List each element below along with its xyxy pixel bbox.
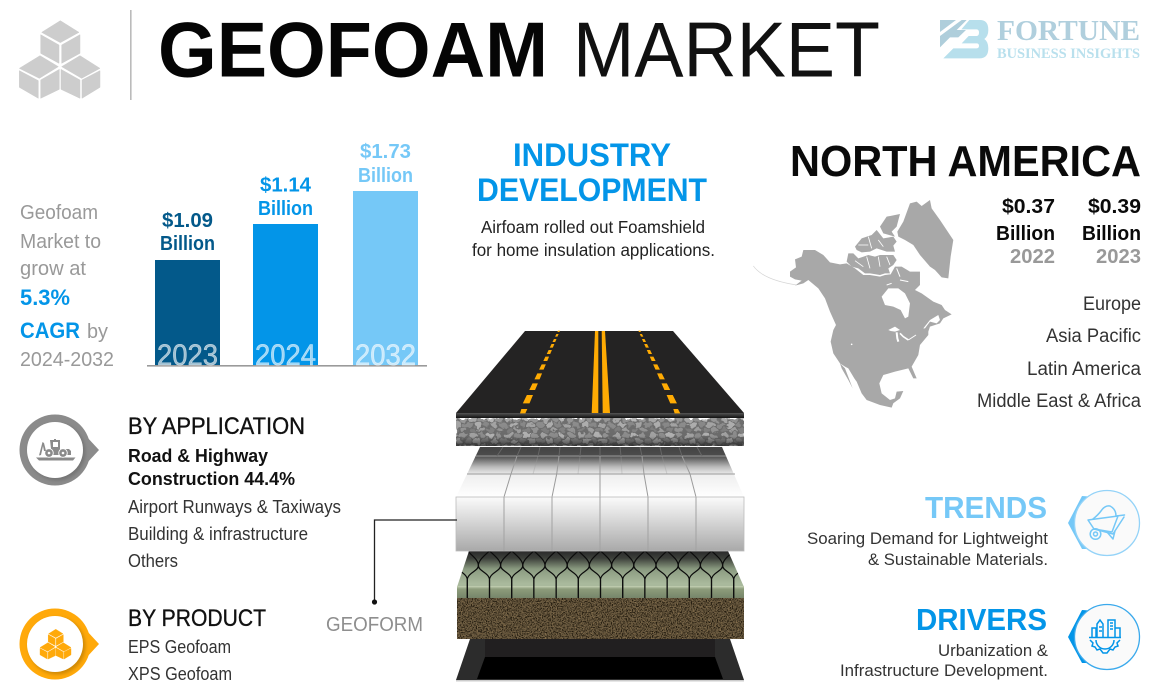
section: by application: Road & Highway bbox=[128, 446, 268, 466]
callout: geoform leader: GEOFORM bbox=[326, 614, 423, 636]
north america values: 2022 bbox=[1010, 246, 1055, 268]
map: north america bbox=[753, 200, 953, 408]
bar chart: Billion bbox=[358, 165, 413, 187]
icon: wheelbarrow badge bbox=[1068, 490, 1140, 556]
north america values bbox=[996, 196, 1141, 268]
icon: application tractor badge bbox=[20, 414, 99, 486]
heading: industry development bbox=[472, 137, 715, 260]
section: drivers: Urbanization & bbox=[938, 641, 1049, 660]
section: by product bbox=[128, 605, 266, 684]
CAGR text block: Geofoam bbox=[20, 202, 98, 224]
icon: city and gear badge bbox=[1068, 604, 1140, 670]
north america values: $0.37 bbox=[1002, 196, 1055, 218]
region list: Europe bbox=[1083, 294, 1141, 315]
heading: north america: NORTH AMERICA bbox=[790, 137, 1141, 186]
bar chart: $1.73 bbox=[360, 141, 411, 163]
brand logo: FORTUNE bbox=[997, 16, 1140, 47]
bar chart: 2024 bbox=[255, 339, 316, 372]
title: MARKET bbox=[573, 6, 880, 94]
section: trends: TRENDS bbox=[925, 490, 1047, 525]
section: by application: Building & infrastructure bbox=[128, 524, 308, 544]
region list: Asia Pacific bbox=[1046, 326, 1141, 347]
north america values: Billion bbox=[1082, 223, 1141, 245]
bar chart bbox=[147, 141, 427, 372]
section: drivers: DRIVERS bbox=[916, 602, 1047, 637]
bar chart: Billion bbox=[258, 198, 313, 220]
brand logo bbox=[940, 16, 1140, 62]
CAGR text block: Market to bbox=[20, 231, 101, 253]
section: trends: Soaring Demand for Lightweight bbox=[807, 529, 1048, 548]
CAGR text block: CAGR bbox=[20, 318, 80, 343]
section: by product: BY PRODUCT bbox=[128, 605, 266, 632]
title: GEOFOAM bbox=[158, 6, 548, 94]
section: by application: BY APPLICATION bbox=[128, 413, 305, 440]
heading: industry development: DEVELOPMENT bbox=[477, 172, 707, 208]
soil layer bbox=[457, 598, 744, 639]
bar chart: 2032 bbox=[355, 339, 416, 372]
section: by application bbox=[128, 413, 341, 571]
section: trends bbox=[807, 490, 1048, 569]
north america values: Billion bbox=[996, 223, 1055, 245]
callout: geoform leader bbox=[326, 520, 457, 636]
aggregate layer bbox=[456, 418, 744, 446]
heading: industry development: Airfoam rolled out Foamshield bbox=[481, 217, 705, 237]
region list: Latin America bbox=[1027, 359, 1141, 380]
road cross-section illustration bbox=[445, 331, 756, 682]
region list: Middle East & Africa bbox=[977, 391, 1141, 412]
bar chart: Billion bbox=[160, 233, 215, 255]
drainage mesh layer bbox=[445, 551, 756, 598]
section: by application: Others bbox=[128, 551, 178, 571]
bar chart: $1.09 bbox=[162, 210, 213, 232]
section: by product: XPS Geofoam bbox=[128, 664, 232, 684]
heading: industry development: INDUSTRY bbox=[513, 137, 671, 173]
geofoam layer bbox=[456, 447, 744, 551]
CAGR text block bbox=[20, 202, 114, 371]
road base layer bbox=[456, 639, 744, 682]
CAGR text block: 5.3% bbox=[20, 285, 70, 310]
brand logo: BUSINESS INSIGHTS bbox=[997, 46, 1140, 62]
section: drivers: Infrastructure Development. bbox=[840, 661, 1048, 680]
map: water features bbox=[845, 237, 940, 385]
section: trends: & Sustainable Materials. bbox=[868, 550, 1048, 569]
title bbox=[158, 6, 880, 94]
asphalt surface bbox=[456, 331, 744, 418]
section: by product: EPS Geofoam bbox=[128, 637, 231, 657]
icon: cubes logo bbox=[19, 21, 100, 98]
heading: industry development: for home insulation applications. bbox=[472, 240, 715, 260]
CAGR text block: by bbox=[87, 321, 108, 343]
bar chart: 2023 bbox=[157, 339, 218, 372]
north america values: 2023 bbox=[1096, 246, 1141, 268]
north america values: $0.39 bbox=[1088, 196, 1141, 218]
CAGR text block: 2024-2032 bbox=[20, 349, 114, 371]
section: by application: Airport Runways & Taxiways bbox=[128, 497, 341, 517]
section: drivers bbox=[840, 602, 1049, 680]
icon: product cubes badge bbox=[20, 608, 99, 680]
CAGR text block: grow at bbox=[20, 258, 86, 280]
region list bbox=[977, 294, 1141, 412]
section: by application: Construction 44.4% bbox=[128, 469, 295, 489]
bar chart: $1.14 bbox=[260, 174, 312, 196]
